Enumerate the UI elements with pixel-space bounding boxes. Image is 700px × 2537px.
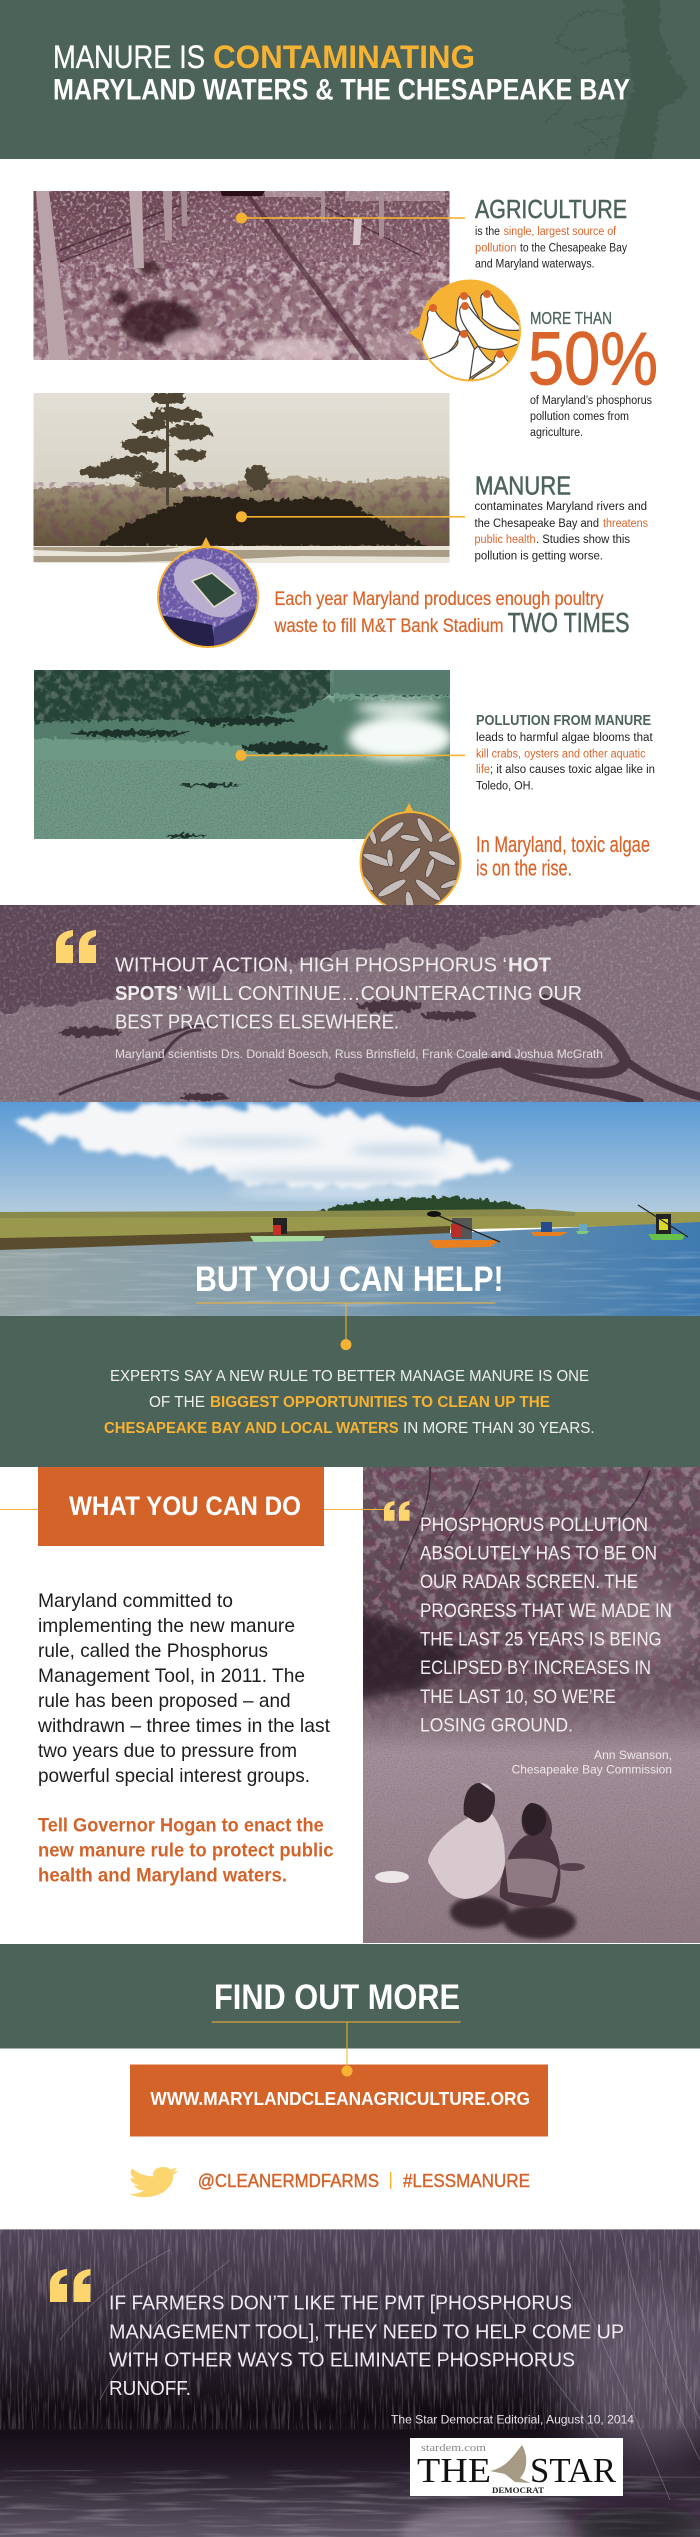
stat: more than 50%: of Maryland’s phosphorus	[530, 395, 652, 407]
photo: children at stream	[355, 1467, 700, 1943]
icon: stadium circle	[155, 537, 260, 650]
text: pollution from manure	[476, 732, 655, 792]
map: Chesapeake Bay silhouette	[545, 0, 688, 165]
text: what you can do: withdrawn – three times in the last	[37, 1715, 331, 1737]
quote attribution: Chesapeake Bay Commission	[512, 1765, 672, 1777]
text: what you can do: two years due to pressure from	[38, 1740, 297, 1762]
experts statement	[104, 1368, 595, 1437]
quote text: PROGRESS THAT WE MADE IN	[420, 1601, 672, 1622]
stat: more than 50%: 50%	[528, 316, 658, 400]
text: manure: . Studies show this	[536, 534, 630, 546]
quote text: MANAGEMENT TOOL], THEY NEED TO HELP COME UP	[109, 2321, 624, 2343]
icon: dead fish circle	[360, 803, 462, 905]
text: what you can do: powerful special interest groups.	[38, 1765, 310, 1787]
quote text: LOSING GROUND.	[420, 1716, 573, 1736]
call to action	[38, 1815, 334, 1887]
stat: more than 50%: pollution comes from	[530, 411, 629, 423]
quote text	[115, 954, 582, 1034]
heading: pollution from manure: POLLUTION FROM MANURE	[476, 713, 651, 729]
text: pollution from manure: ; it also causes toxic algae like in	[490, 764, 655, 776]
quote text	[420, 1515, 672, 1736]
text: manure: threatens	[603, 518, 648, 530]
title	[53, 39, 630, 106]
quote mark	[56, 930, 96, 963]
title: MANURE IS	[53, 39, 205, 75]
quote mark	[50, 2269, 90, 2302]
header band	[0, 0, 700, 165]
callout dot and leader: algae	[236, 750, 465, 761]
experts statement: CHESAPEAKE BAY AND LOCAL WATERS	[104, 1420, 399, 1437]
text: agriculture: single, largest source of	[504, 226, 617, 238]
quote attribution: Maryland scientists Drs. Donald Boesch, Russ Brinsfield, Frank Coale and Joshua McGrath	[115, 1049, 603, 1061]
social handles: #LESSMANURE	[403, 2171, 530, 2191]
leader lines beside what you can do	[0, 1509, 384, 1510]
logo: The Star Democrat: DEMOCRAT	[492, 2485, 544, 2495]
quote text: ECLIPSED BY INCREASES IN	[420, 1658, 651, 1679]
quote text: THE LAST 25 YEARS IS BEING	[420, 1630, 662, 1650]
text: stadium comparison: waste to fill M&T Bank Stadium	[274, 616, 504, 637]
heading: agriculture: AGRICULTURE	[475, 194, 627, 224]
photo: kayakers on marsh water	[0, 1102, 700, 1316]
quote text: WITHOUT ACTION, HIGH PHOSPHORUS ‘	[115, 954, 507, 976]
call to action: Tell Governor Hogan to enact the	[38, 1815, 324, 1837]
quote attribution	[512, 1750, 672, 1777]
connector and dot	[196, 1302, 496, 1350]
logo: The Star Democrat: stardem.com	[421, 2442, 487, 2454]
experts statement: BIGGEST OPPORTUNITIES TO CLEAN UP THE	[210, 1394, 550, 1411]
quote text	[109, 2292, 624, 2400]
text: stadium comparison	[274, 589, 630, 638]
text: stadium comparison: TWO TIMES	[508, 607, 630, 638]
text: toxic algae on the rise: is on the rise.	[476, 855, 572, 880]
panel: scientists quote over marsh	[0, 905, 700, 1102]
quote text: PHOSPHORUS POLLUTION	[420, 1515, 648, 1536]
website button	[130, 2064, 548, 2136]
experts statement: OF THE	[149, 1394, 205, 1411]
stat: more than 50%: agriculture.	[530, 427, 583, 439]
text: toxic algae on the rise	[476, 832, 650, 880]
text: what you can do: Maryland committed to	[38, 1590, 233, 1612]
text: agriculture: to the Chesapeake Bay	[520, 242, 627, 254]
title: CONTAMINATING	[213, 39, 475, 75]
panel: experts text	[0, 1302, 700, 1467]
quote text: IF FARMERS DON’T LIKE THE PMT [PHOSPHORUS	[109, 2292, 572, 2314]
photo: algae bloom	[25, 660, 460, 839]
text: manure: the Chesapeake Bay and	[474, 518, 599, 530]
quote text: RUNOFF.	[109, 2378, 191, 2400]
quote text: SPOTS	[115, 983, 178, 1005]
text: pollution from manure: Toledo, OH.	[476, 780, 534, 792]
social handles: @CLEANERMDFARMS	[198, 2171, 379, 2191]
photo: manure pile	[25, 392, 460, 563]
call to action: health and Maryland waters.	[38, 1865, 287, 1887]
quote text: OUR RADAR SCREEN. THE	[420, 1572, 638, 1593]
text: what you can do: Management Tool, in 2011. The	[38, 1665, 305, 1687]
text: manure	[474, 501, 648, 562]
quote text: ’ WILL CONTINUE…COUNTERACTING OUR	[178, 983, 582, 1005]
text: manure: pollution is getting worse.	[474, 550, 603, 562]
text: what you can do: rule has been proposed – and	[38, 1690, 291, 1712]
heading: manure: MANURE	[475, 470, 571, 500]
experts statement: EXPERTS SAY A NEW RULE TO BETTER MANAGE MANURE IS ONE	[110, 1368, 589, 1385]
quote mark	[384, 1501, 410, 1521]
text: agriculture	[475, 226, 627, 271]
quote text: BEST PRACTICES ELSEWHERE.	[115, 1012, 399, 1034]
quote text: WITH OTHER WAYS TO ELIMINATE PHOSPHORUS	[109, 2350, 575, 2372]
icon: twitter bird	[129, 2167, 178, 2197]
logo: The Star Democrat: STAR	[530, 2451, 617, 2490]
text: pollution from manure: life	[476, 764, 490, 776]
stat: more than 50%	[528, 308, 658, 439]
quote text: HOT	[508, 954, 551, 976]
text: manure: public health	[474, 534, 536, 546]
kayak 3	[531, 1222, 590, 1236]
callout dot and leader: agriculture	[236, 212, 465, 224]
text: agriculture: is the	[475, 226, 500, 238]
children	[375, 1783, 585, 1939]
logo: The Star Democrat	[410, 2438, 623, 2496]
kayak 1	[250, 1218, 325, 1242]
text: agriculture: and Maryland waterways.	[475, 259, 595, 271]
heading box: what you can do	[38, 1467, 324, 1546]
stat: more than 50%: MORE THAN	[530, 308, 612, 328]
panel: find out more	[0, 1944, 700, 2048]
kayak 2	[427, 1211, 500, 1248]
heading: but you can help: BUT YOU CAN HELP!	[195, 1260, 504, 1299]
text: stadium comparison: Each year Maryland produces enough poultry	[274, 589, 604, 610]
text: what you can do: implementing the new manure	[38, 1615, 295, 1637]
call to action: new manure rule to protect public	[38, 1840, 334, 1862]
quote attribution: The Star Democrat Editorial, August 10, 2014	[391, 2413, 634, 2427]
connector and dot	[212, 2022, 461, 2076]
experts statement: IN MORE THAN 30 YEARS.	[403, 1420, 595, 1437]
icon: chickens circle	[409, 280, 522, 388]
text: what you can do	[37, 1590, 331, 1787]
quote attribution: Ann Swanson,	[594, 1750, 672, 1762]
kayak 4	[638, 1205, 688, 1240]
text: pollution from manure: leads to harmful algae blooms that	[476, 732, 654, 744]
quote text: ABSOLUTELY HAS TO BE ON	[420, 1544, 657, 1564]
quote text: THE LAST 10, SO WE’RE	[420, 1687, 616, 1708]
text: manure: contaminates Maryland rivers and	[474, 501, 647, 513]
text: pollution from manure: kill crabs, oysters and other aquatic	[476, 748, 646, 760]
website button: WWW.MARYLANDCLEANAGRICULTURE.ORG	[150, 2089, 530, 2109]
panel: find out more: FIND OUT MORE	[214, 1978, 460, 2017]
text: agriculture: pollution	[475, 242, 516, 254]
logo: The Star Democrat: THE	[417, 2451, 491, 2490]
social handles	[198, 2171, 530, 2191]
heading box: what you can do: WHAT YOU CAN DO	[69, 1491, 301, 1521]
panel: editorial quote over reeds	[0, 2229, 700, 2537]
callout dot and leader: manure	[236, 511, 465, 522]
photo: chicken house	[33, 191, 450, 362]
text: what you can do: rule, called the Phosphorus	[38, 1640, 268, 1662]
